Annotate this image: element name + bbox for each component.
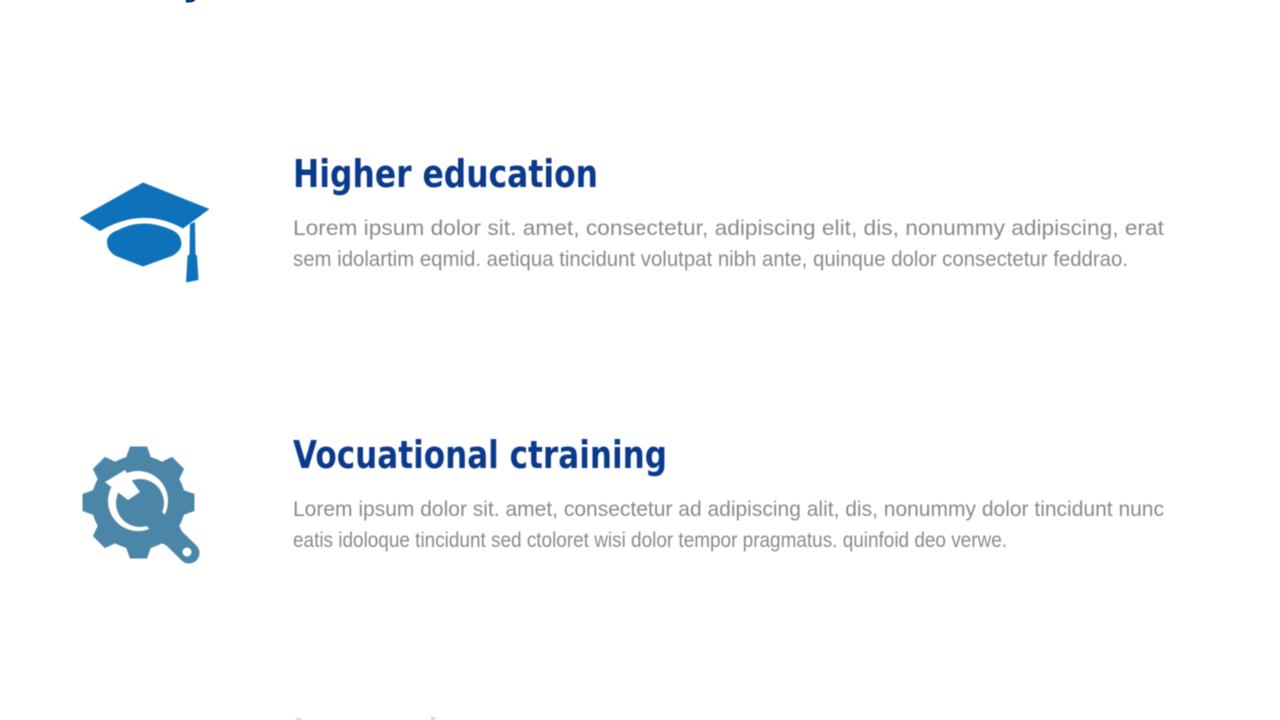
heading: higher education: Higher education [293,152,598,196]
icon: gear and wrench [82,446,194,558]
text block: vocational training description [293,498,1164,552]
text block: vocational training description: Lorem ipsum dolor sit. amet, consectetur ad adipiscing alit, dis, nonummy dolor tincidunt nunc [293,498,1164,521]
panel: vocational training [82,433,1164,558]
heading: vocational training: Vocuational ctraining [293,433,667,477]
text block: higher education description [293,217,1164,271]
text block: higher education description: Lorem ipsum dolor sit. amet, consectetur, adipiscing elit, dis, nonummy adipiscing, erat [293,217,1164,240]
panel: higher education [80,152,1164,282]
text block: vocational training description: eatis idoloque tincidunt sed ctoloret wisi dolor tempor pragmatus. quinfoid deo verwe. [293,529,1007,552]
icon: graduation cap [80,182,210,282]
text block: higher education description: sem idolartim eqmid. aetiqua tincidunt volutpat nibh ante, quinque dolor consectetur feddrao. [293,248,1128,271]
cropped heading fragment at bottom [296,717,435,720]
